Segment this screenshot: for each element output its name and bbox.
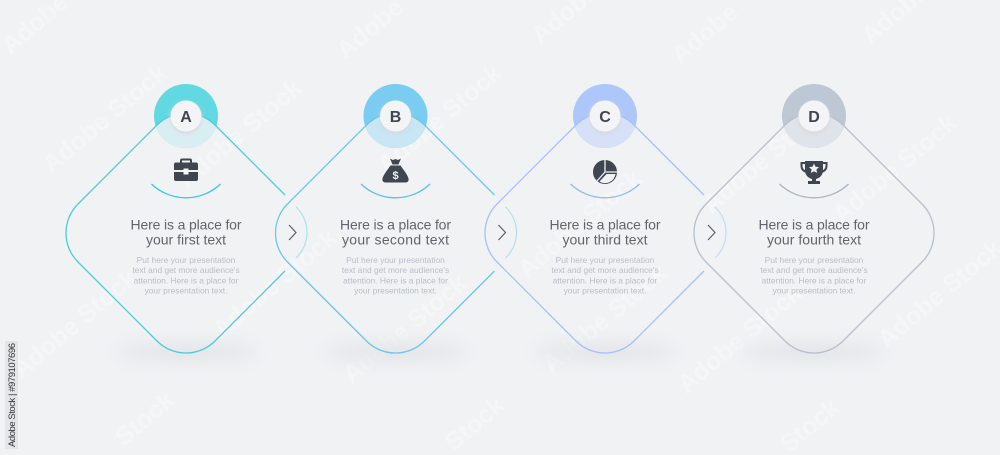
watermark: Adobe Stock: [697, 99, 832, 219]
watermark: Adobe Stock: [827, 109, 962, 229]
watermark: Adobe Stock: [512, 164, 647, 284]
letter badge A: A: [180, 109, 192, 126]
watermark: Adobe Stock: [537, 259, 672, 379]
floor shadow D: [742, 344, 886, 360]
diamond outline A: [66, 113, 285, 353]
body text A: attention. Here is a place for: [134, 276, 239, 286]
body text A: your presentation text.: [145, 286, 227, 296]
floor shadow A: [114, 344, 258, 360]
badge ring A: [154, 84, 218, 148]
heading A: Here is a place for: [130, 216, 242, 232]
heading B: your second text: [342, 232, 449, 248]
diamond outline B: [275, 113, 494, 353]
watermark: Adobe Stock: [672, 279, 807, 399]
connector: A to B: [289, 207, 307, 258]
body text D: Put here your presentation: [765, 255, 864, 265]
letter badge B: B: [390, 109, 401, 126]
body text B: text and get more audience's: [342, 265, 449, 275]
icon: briefcase: [174, 158, 198, 181]
icon: money bag: [382, 158, 409, 182]
diamond outline C: [485, 113, 704, 353]
body text B: Put here your presentation: [346, 255, 445, 265]
arc under icon B: [361, 184, 430, 198]
body text C: attention. Here is a place for: [553, 276, 658, 286]
watermark: Stock: [440, 391, 510, 455]
body text B: attention. Here is a place for: [343, 276, 448, 286]
icon: pie chart: [593, 160, 617, 184]
body text A: Put here your presentation: [137, 255, 236, 265]
watermark: Adobe Stock: [172, 74, 307, 194]
body text C: your presentation text.: [564, 286, 646, 296]
watermark: Adobe Stock: [37, 59, 172, 179]
heading D: Here is a place for: [758, 216, 870, 232]
watermark: Adobe: [666, 0, 744, 70]
badge ring C: [573, 84, 637, 148]
connector: B to C: [498, 207, 517, 258]
heading D: your fourth text: [767, 232, 861, 248]
letter badge C: C: [599, 109, 611, 126]
body text C: text and get more audience's: [551, 265, 659, 275]
letter badge D: D: [808, 109, 820, 126]
floor shadow B: [324, 344, 468, 360]
heading C: your third text: [562, 232, 648, 248]
body text C: Put here your presentation: [556, 255, 655, 265]
watermark: Adobe Stock: [372, 59, 507, 179]
panel: C: [485, 84, 704, 360]
body text B: your presentation text.: [354, 286, 437, 296]
arc under icon C: [570, 184, 640, 198]
panel: B: [275, 84, 494, 360]
body text D: attention. Here is a place for: [762, 276, 867, 286]
watermark: Adobe Stock: [7, 264, 142, 384]
arc under icon D: [780, 184, 848, 198]
letter badge A: [170, 100, 202, 134]
arc under icon A: [152, 184, 220, 198]
stock id label: Adobe Stock | #979107696: [7, 343, 18, 447]
badge ring B: [364, 84, 428, 148]
body text D: text and get more audience's: [760, 265, 868, 275]
letter badge C: [590, 100, 620, 134]
watermark: Stock: [110, 386, 180, 451]
heading C: Here is a place for: [550, 216, 661, 232]
letter badge B: [380, 100, 411, 134]
connector: C to D: [708, 207, 726, 258]
letter badge D: [798, 100, 830, 134]
heading B: Here is a place for: [340, 216, 451, 232]
icon: money bag: $: [392, 170, 399, 182]
floor shadow C: [533, 344, 677, 360]
badge ring D: [782, 84, 846, 148]
heading A: your first text: [146, 232, 226, 248]
panel: D: [694, 84, 934, 360]
body text A: text and get more audience's: [132, 265, 240, 275]
body text D: your presentation text.: [773, 286, 855, 296]
watermark: Adobe Stock: [337, 269, 472, 389]
icon: trophy: [802, 161, 826, 184]
watermark: Adobe Stock: [207, 224, 342, 344]
diamond outline D: [694, 113, 934, 353]
panel: A: [66, 84, 285, 360]
